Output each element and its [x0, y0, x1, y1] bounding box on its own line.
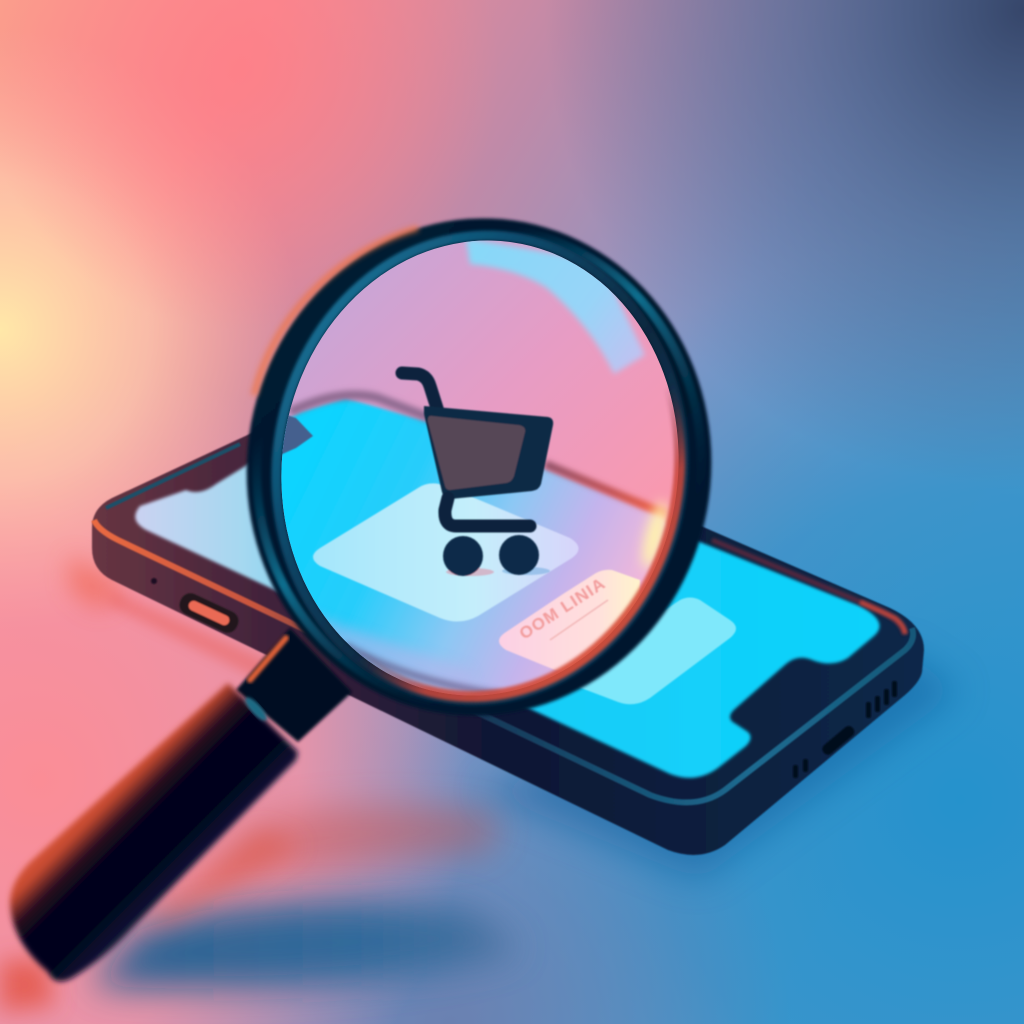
magnifying glass	[10, 188, 743, 981]
dark-red glint along top-right bezel	[712, 540, 905, 634]
shoulder glint	[242, 695, 270, 723]
shadows under phone and magnifier	[0, 555, 960, 1012]
phone screen	[135, 395, 880, 778]
wheel shadows	[446, 568, 494, 576]
lens warm flare	[638, 500, 672, 570]
inner teal rim	[247, 209, 713, 727]
cart handle	[402, 373, 442, 424]
handle	[10, 628, 352, 981]
platform card	[313, 483, 579, 622]
charging port and speaker grilles, right side	[793, 681, 897, 778]
lens frame	[215, 188, 743, 746]
lens reflection arc	[466, 238, 645, 374]
shopping cart icon	[402, 373, 553, 576]
charging port, left side	[151, 578, 242, 636]
outer orange edge glow	[254, 228, 418, 395]
bottom phone edge through lens	[345, 645, 500, 694]
cart wheels	[443, 536, 483, 576]
handle grip	[10, 683, 298, 981]
lens view	[281, 240, 679, 696]
handle neck	[236, 628, 352, 742]
cart frame	[445, 498, 530, 526]
phone body	[92, 387, 924, 855]
magnified screen	[281, 397, 666, 693]
top edge highlight	[106, 444, 240, 508]
lower lens haze	[321, 610, 466, 688]
receipt tag: OOM LINIA	[516, 574, 609, 643]
phone rim highlight	[94, 520, 913, 802]
smartphone	[92, 387, 924, 855]
screen card	[560, 598, 736, 704]
inner red rim	[251, 214, 709, 722]
receipt tag	[499, 570, 640, 672]
magnified notch	[282, 414, 314, 455]
cart basket	[424, 406, 553, 499]
magnified phone bezel edge	[290, 395, 430, 418]
outer teal ring highlight	[226, 199, 732, 735]
